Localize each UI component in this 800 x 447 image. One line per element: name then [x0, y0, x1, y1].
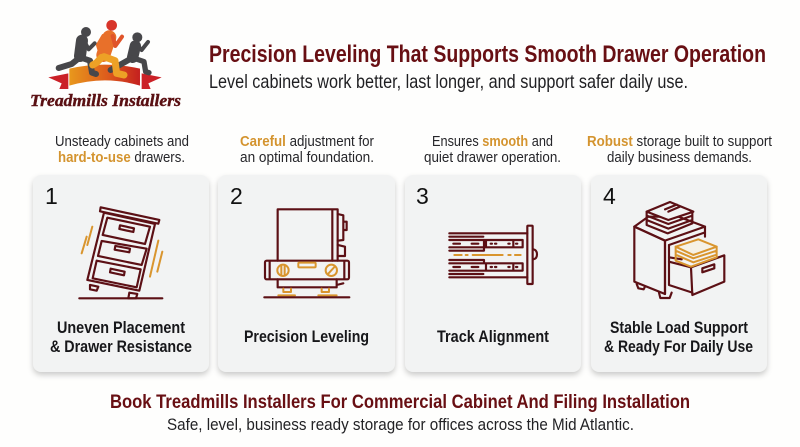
- footer text: Safe, level, business ready storage for offices across the Mid Atlantic.: [167, 415, 634, 434]
- caption 1: [55, 134, 189, 166]
- footer heading: Book Treadmills Installers For Commercial Cabinet And Filing Installation: [110, 391, 690, 413]
- step number 2: 2: [230, 183, 243, 209]
- caption 4: Robust storage built to support: [587, 134, 772, 150]
- panel: step 3: [405, 175, 581, 372]
- label 4: & Ready For Daily Use: [604, 337, 753, 356]
- subtitle: Level cabinets work better, last longer, and support safer daily use.: [209, 71, 688, 93]
- caption 2: an optimal foundation.: [240, 150, 374, 166]
- caption 4: daily business demands.: [607, 150, 752, 166]
- icon: drawer slide tracks: [449, 226, 537, 284]
- step number 1: 1: [45, 183, 58, 209]
- logo: Treadmills Installers: [30, 20, 181, 110]
- label 1: & Drawer Resistance: [50, 337, 192, 356]
- step number 3: 3: [416, 183, 429, 209]
- label 4: [604, 318, 753, 356]
- panel: step 4: [591, 175, 767, 372]
- caption 3: quiet drawer operation.: [424, 150, 561, 166]
- label 1: Uneven Placement: [57, 318, 185, 337]
- label 4: Stable Load Support: [610, 318, 748, 337]
- caption 2: Careful adjustment for: [240, 134, 374, 150]
- caption 3: [424, 134, 561, 166]
- label 2: Precision Leveling: [244, 327, 369, 346]
- caption 4: [587, 134, 772, 166]
- panel: step 2: [218, 175, 395, 372]
- caption 2: [240, 134, 374, 166]
- icon: loaded filing cabinet: [634, 202, 724, 298]
- caption 3: Ensures smooth and: [432, 134, 553, 150]
- logo wordmark: Treadmills Installers: [30, 91, 181, 110]
- label 3: Track Alignment: [437, 327, 549, 346]
- caption 1: Unsteady cabinets and: [55, 134, 189, 150]
- logo runners and banner: [48, 20, 162, 89]
- icon: cabinet on spirit level: [264, 209, 349, 297]
- step number 4: 4: [603, 183, 616, 209]
- panel: step 1: [33, 175, 209, 372]
- label 1: [50, 318, 192, 356]
- caption 1: hard-to-use drawers.: [58, 150, 185, 166]
- icon: tilted cabinet: [79, 207, 162, 298]
